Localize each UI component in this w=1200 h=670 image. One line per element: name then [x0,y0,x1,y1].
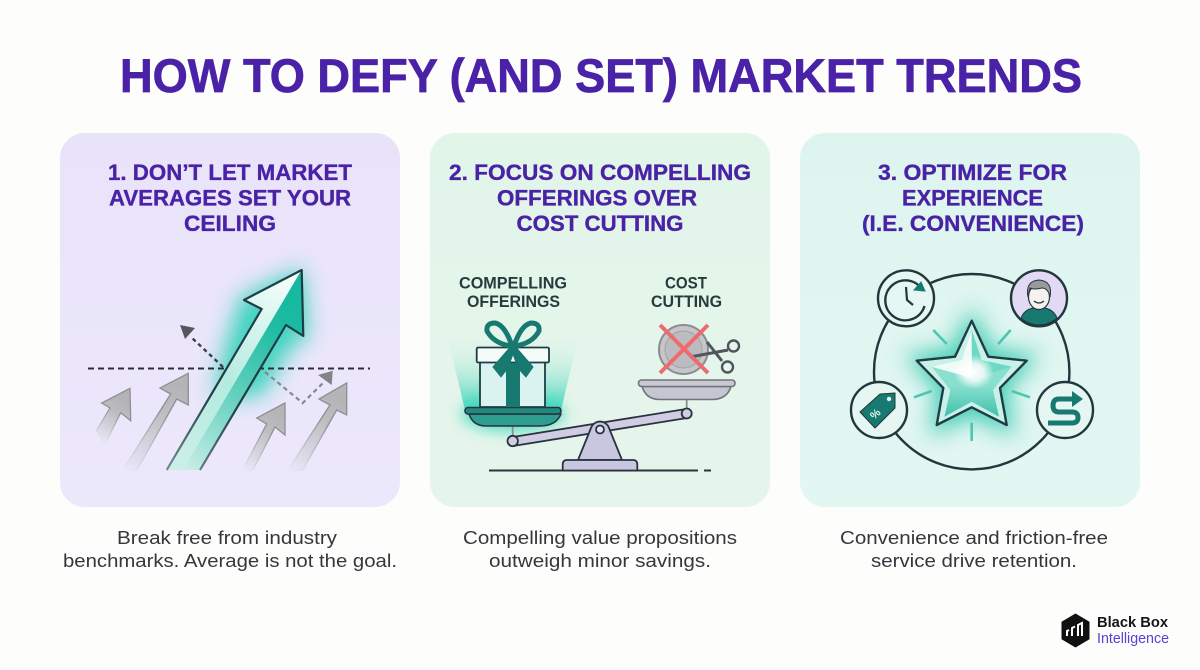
label: cost cutting [651,274,722,311]
panel 3 caption [840,527,1108,571]
dashed average line [88,368,370,370]
icon: person [1011,270,1067,326]
right gray pan [638,380,735,400]
label: compelling offerings: COMPELLING [459,274,567,292]
panel heading: 2. FOCUS ON COMPELLING [449,160,751,185]
ground line [489,470,711,472]
icon: gift box [477,323,549,407]
icon: balance scale [447,323,739,470]
panel heading: EXPERIENCE [902,186,1043,210]
panel background [60,133,400,507]
icon: winding arrow [1037,382,1093,438]
panel 1 caption [63,527,397,571]
teal light glow [447,335,579,432]
dotted deflected arrow down-right [265,371,333,403]
icon: scissors [690,340,739,372]
star glow [912,316,1032,430]
panel: market averages [60,133,400,507]
panel 3 caption: service drive retention. [871,550,1077,571]
red cross [660,325,708,373]
title: HOW TO DEFY (AND SET) MARKET TRENDS [120,49,1082,102]
panel 2 caption [463,527,737,571]
rising arrows chart [88,268,370,470]
icon: coin [659,325,708,374]
icon: star [917,321,1027,425]
logo: Black Box Intelligence [1062,614,1169,647]
panel 2 caption: outweigh minor savings. [489,550,711,571]
gray arrow 3 [243,403,285,470]
logo hexagon mark [1062,614,1089,647]
rays [914,330,1030,441]
panel 1 caption: Break free from industry [117,527,338,548]
left teal pan [465,408,561,426]
gray arrow 1 [97,388,131,444]
panel: experience [800,133,1140,507]
outer ring [874,274,1069,469]
gray arrow 4 [288,383,347,470]
panel heading [449,160,751,236]
icon: price tag: % [868,407,884,422]
teal glow [215,268,308,400]
panel 3 caption: Convenience and friction-free [840,527,1108,548]
panel: compelling offerings [430,133,770,507]
panel heading: AVERAGES SET YOUR [109,186,351,210]
label: cost cutting: CUTTING [651,293,722,311]
panel heading [862,160,1084,236]
panel heading: COST CUTTING [516,211,684,236]
panel heading: OFFERINGS OVER [497,186,697,210]
label: cost cutting: COST [665,274,707,292]
logo wordmark: Intelligence [1097,631,1169,647]
panel heading: 3. OPTIMIZE FOR [878,160,1067,185]
panel 1 caption: benchmarks. Average is not the goal. [63,550,397,571]
panel heading [108,160,352,236]
experience diagram [851,270,1093,469]
panel background [430,133,770,507]
main teal arrow [167,270,303,470]
icon: price tag [851,382,907,438]
panel background [800,133,1140,507]
panel heading: 1. DON’T LET MARKET [108,160,352,185]
label: compelling offerings: OFFERINGS [467,293,560,311]
dotted deflected arrow up-left [180,325,223,367]
panel heading: (I.E. CONVENIENCE) [862,211,1084,236]
scale beam [508,399,692,446]
gray arrow 2 [123,373,188,470]
panel 2 caption: Compelling value propositions [463,527,737,548]
logo wordmark: Black Box [1097,615,1168,631]
label: compelling offerings [459,274,567,311]
panel heading: CEILING [184,211,276,236]
logo wordmark [1097,615,1169,647]
icon: clock [878,270,934,326]
fulcrum stand [563,422,637,470]
